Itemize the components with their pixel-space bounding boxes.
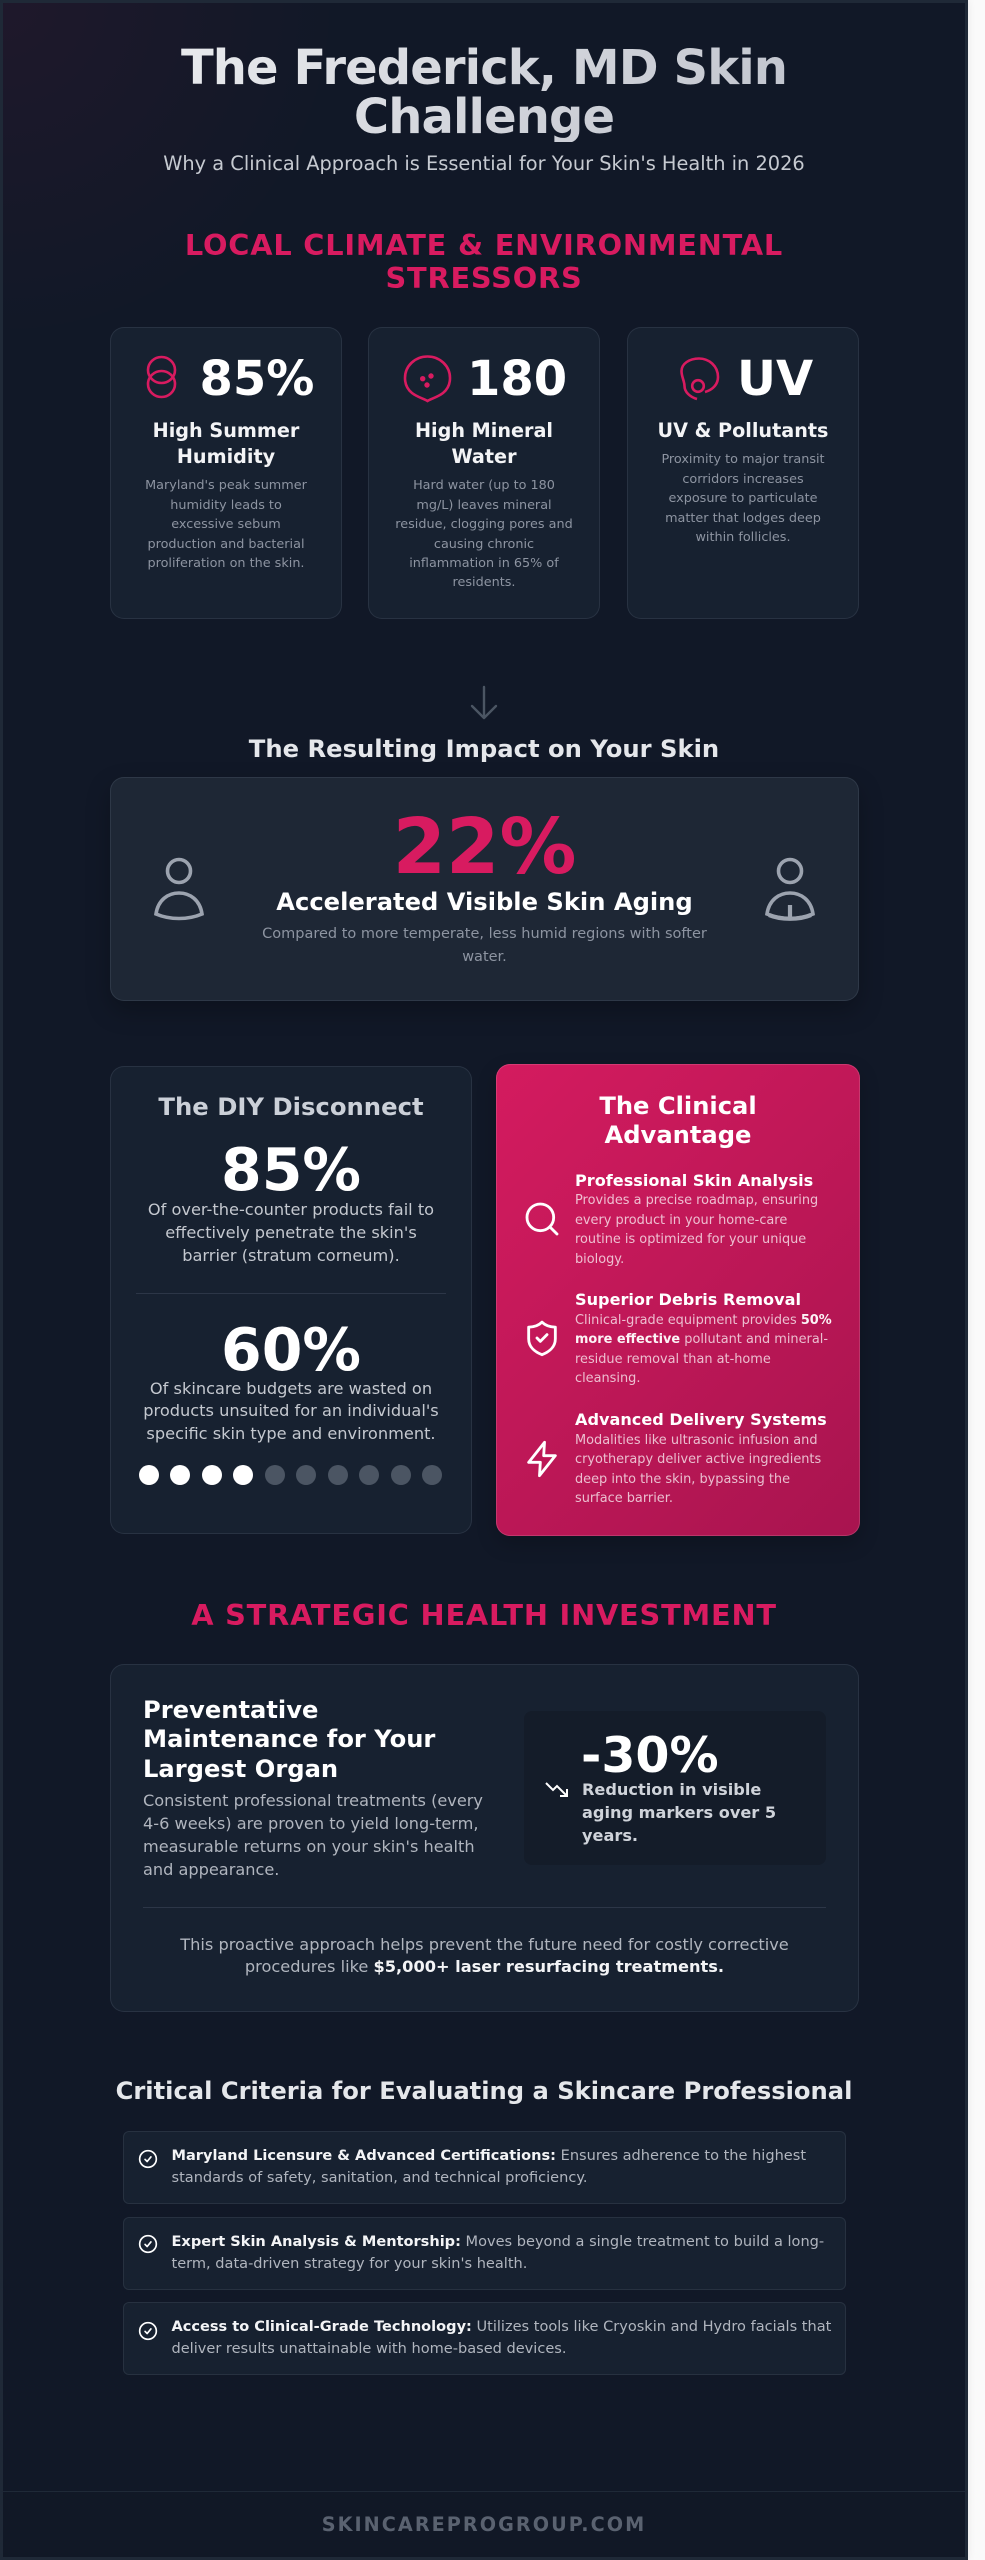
stat: 60%: 60% — [221, 1316, 361, 1384]
criterion text — [172, 2318, 831, 2357]
stat: 180: 180 — [467, 350, 567, 406]
impact heading: Accelerated Visible Skin Aging — [276, 888, 693, 916]
stat description — [143, 1379, 439, 1443]
stat description: Of skincare budgets are wasted on — [150, 1379, 432, 1398]
panel heading: The Clinical — [599, 1092, 757, 1120]
dot scale: 4 of 10 — [139, 1465, 442, 1485]
panel: high summer humidity — [110, 327, 342, 619]
benefit: skin analysis — [575, 1171, 818, 1267]
benefit: debris removal: cleansing. — [575, 1371, 640, 1386]
panel: impact on skin — [110, 777, 859, 1001]
icon: mineral drop — [404, 355, 452, 402]
criterion text: deliver results unattainable with home-based devices. — [172, 2340, 566, 2357]
stat: UV: UV — [737, 350, 813, 406]
benefit: skin analysis: biology. — [575, 1252, 624, 1267]
footer url: SKINCAREPROGROUP.COM — [322, 2513, 646, 2536]
benefit: debris removal — [575, 1290, 832, 1386]
criterion: skin analysis — [123, 2217, 846, 2290]
icon: person right — [765, 858, 815, 921]
panel heading: Advantage — [605, 1120, 751, 1148]
callout text — [582, 1780, 776, 1845]
icon: lightning bolt — [527, 1440, 557, 1478]
panel: uv and pollutants — [627, 327, 859, 619]
benefit: skin analysis: Professional Skin Analysis — [575, 1171, 813, 1190]
criterion text: Access to Clinical-Grade Technology: Utilizes tools like Cryoskin and Hydro facials that — [172, 2318, 831, 2335]
card description: inflammation in 65% of — [409, 556, 559, 571]
benefit: delivery systems — [575, 1410, 827, 1506]
card description — [145, 478, 307, 571]
heading: local climate stressors: LOCAL CLIMATE & ENVIRONMENTAL — [185, 228, 783, 262]
heading: resulting impact: The Resulting Impact on Your Skin — [249, 734, 719, 763]
card description: Proximity to major transit — [661, 452, 825, 467]
icon: shield check — [527, 1320, 557, 1356]
card description: exposure to particulate — [668, 491, 818, 506]
benefit: delivery systems: Advanced Delivery Systems — [575, 1410, 827, 1429]
heading: critical criteria: Critical Criteria for Evaluating a Skincare Professional — [116, 2077, 852, 2105]
footer — [3, 2491, 965, 2557]
panel body text: measurable returns on your skin's health — [143, 1837, 475, 1856]
stat: 85%: 85% — [221, 1136, 361, 1204]
benefit: delivery systems: deep into the skin, bypassing the — [575, 1472, 790, 1487]
card description: excessive sebum — [171, 517, 281, 532]
card description: proliferation on the skin. — [148, 556, 304, 571]
card description — [395, 478, 573, 590]
criterion: technology — [123, 2302, 846, 2375]
panel heading — [143, 1696, 436, 1782]
arrow: flows down to impact — [470, 686, 498, 720]
card description: Hard water (up to 180 — [413, 478, 555, 493]
card description: production and bacterial — [147, 537, 305, 552]
panel: the diy disconnect — [110, 1066, 472, 1534]
closing note: procedures like $5,000+ laser resurfacing treatments. — [245, 1957, 724, 1976]
card heading: UV & Pollutants — [658, 419, 828, 442]
panel heading: Maintenance for Your — [143, 1725, 435, 1753]
heading: strategic health investment: A STRATEGIC HEALTH INVESTMENT — [191, 1598, 777, 1632]
card description: matter that lodges deep — [665, 511, 821, 526]
panel: preventative maintenance — [110, 1664, 859, 2012]
benefit: skin analysis: routine is optimized for your unique — [575, 1232, 806, 1247]
icon: trending down — [545, 1782, 568, 1797]
impact description — [262, 926, 707, 965]
stat: 85%: 85% — [200, 350, 314, 406]
card description — [661, 452, 825, 545]
card heading: High Mineral — [415, 419, 553, 442]
panel heading — [599, 1092, 757, 1148]
callout text: years. — [582, 1826, 638, 1845]
icon: check circle — [138, 2150, 158, 2168]
benefit: skin analysis: Provides a precise roadmap, ensuring — [575, 1193, 818, 1208]
card description: residents. — [453, 575, 515, 590]
icon: check circle — [138, 2234, 158, 2254]
title: Challenge — [354, 88, 614, 144]
subtitle: Why a Clinical Approach is Essential for Your Skin's Health in 2026 — [163, 152, 805, 175]
benefit: debris removal: Superior Debris Removal — [575, 1290, 801, 1309]
panel body text: 4-6 weeks) are proven to yield long-term, — [143, 1814, 479, 1833]
benefit: debris removal: Clinical-grade equipment provides 50% — [575, 1313, 832, 1328]
benefit: skin analysis: every product in your home-care — [575, 1213, 787, 1228]
icon: humidity rings — [146, 356, 176, 398]
benefit: debris removal: more effective pollutant and mineral- — [575, 1332, 828, 1347]
closing note: This proactive approach helps prevent the future need for costly corrective — [180, 1935, 789, 1954]
card heading — [153, 419, 300, 468]
stat description: products unsuited for an individual's — [143, 1401, 439, 1420]
callout text: aging markers over 5 — [582, 1803, 776, 1822]
closing note — [180, 1935, 789, 1976]
criterion text: Expert Skin Analysis & Mentorship: Moves beyond a single treatment to build a long- — [172, 2233, 824, 2250]
card description: within follicles. — [695, 530, 791, 545]
card description: corridors increases — [682, 472, 804, 487]
callout: -30% — [524, 1711, 826, 1865]
stat description: specific skin type and environment. — [146, 1424, 436, 1443]
panel: the clinical advantage — [496, 1064, 860, 1536]
card heading — [415, 419, 553, 468]
icon: uv particle — [680, 357, 720, 400]
card heading: Water — [451, 445, 517, 468]
card heading: High Summer — [153, 419, 299, 442]
criterion text — [172, 2233, 824, 2272]
title — [0, 44, 968, 142]
benefit: delivery systems: surface barrier. — [575, 1491, 673, 1506]
impact description: water. — [462, 949, 507, 965]
criterion text: term, data-driven strategy for your skin's health. — [172, 2255, 527, 2272]
criterion text: standards of safety, sanitation, and technical proficiency. — [172, 2169, 588, 2186]
criterion: licensure — [123, 2131, 846, 2204]
panel: high mineral water — [368, 327, 600, 619]
card description: mg/L) leaves mineral — [416, 498, 552, 513]
benefit: debris removal: residue removal than at-home — [575, 1352, 771, 1367]
heading: local climate stressors: STRESSORS — [385, 260, 582, 294]
benefit: delivery systems: cryotherapy deliver active ingredients — [575, 1452, 821, 1467]
card description: Maryland's peak summer — [145, 478, 307, 493]
stat description: Of over-the-counter products fail to — [148, 1200, 434, 1219]
icon: check circle — [138, 2322, 158, 2340]
title: The Frederick, MD Skin — [181, 40, 787, 96]
card description: humidity leads to — [170, 498, 282, 513]
panel body text: Consistent professional treatments (every — [143, 1791, 483, 1810]
card heading: Humidity — [177, 445, 275, 468]
icon: person left — [154, 858, 204, 920]
icon: search — [526, 1202, 558, 1236]
card description: causing chronic — [434, 537, 534, 552]
stat description — [148, 1200, 434, 1265]
stat: 22%: 22% — [393, 802, 576, 892]
stat: -30%: -30% — [581, 1726, 719, 1784]
panel heading: Preventative — [143, 1696, 318, 1724]
panel body text: and appearance. — [143, 1860, 279, 1878]
card description: residue, clogging pores and — [395, 517, 573, 532]
benefit: delivery systems: Modalities like ultrasonic infusion and — [575, 1433, 818, 1448]
criterion text: Maryland Licensure & Advanced Certifications: Ensures adherence to the highest — [172, 2147, 806, 2164]
criterion text — [172, 2147, 806, 2186]
callout text: Reduction in visible — [582, 1780, 761, 1799]
impact description: Compared to more temperate, less humid regions with softer — [262, 926, 707, 942]
stat description: effectively penetrate the skin's — [165, 1223, 417, 1242]
panel heading: The DIY Disconnect — [158, 1092, 424, 1121]
panel body text — [143, 1791, 483, 1878]
heading: local climate stressors — [185, 228, 783, 294]
stat description: barrier (stratum corneum). — [182, 1246, 400, 1265]
panel heading: Largest Organ — [143, 1754, 338, 1782]
